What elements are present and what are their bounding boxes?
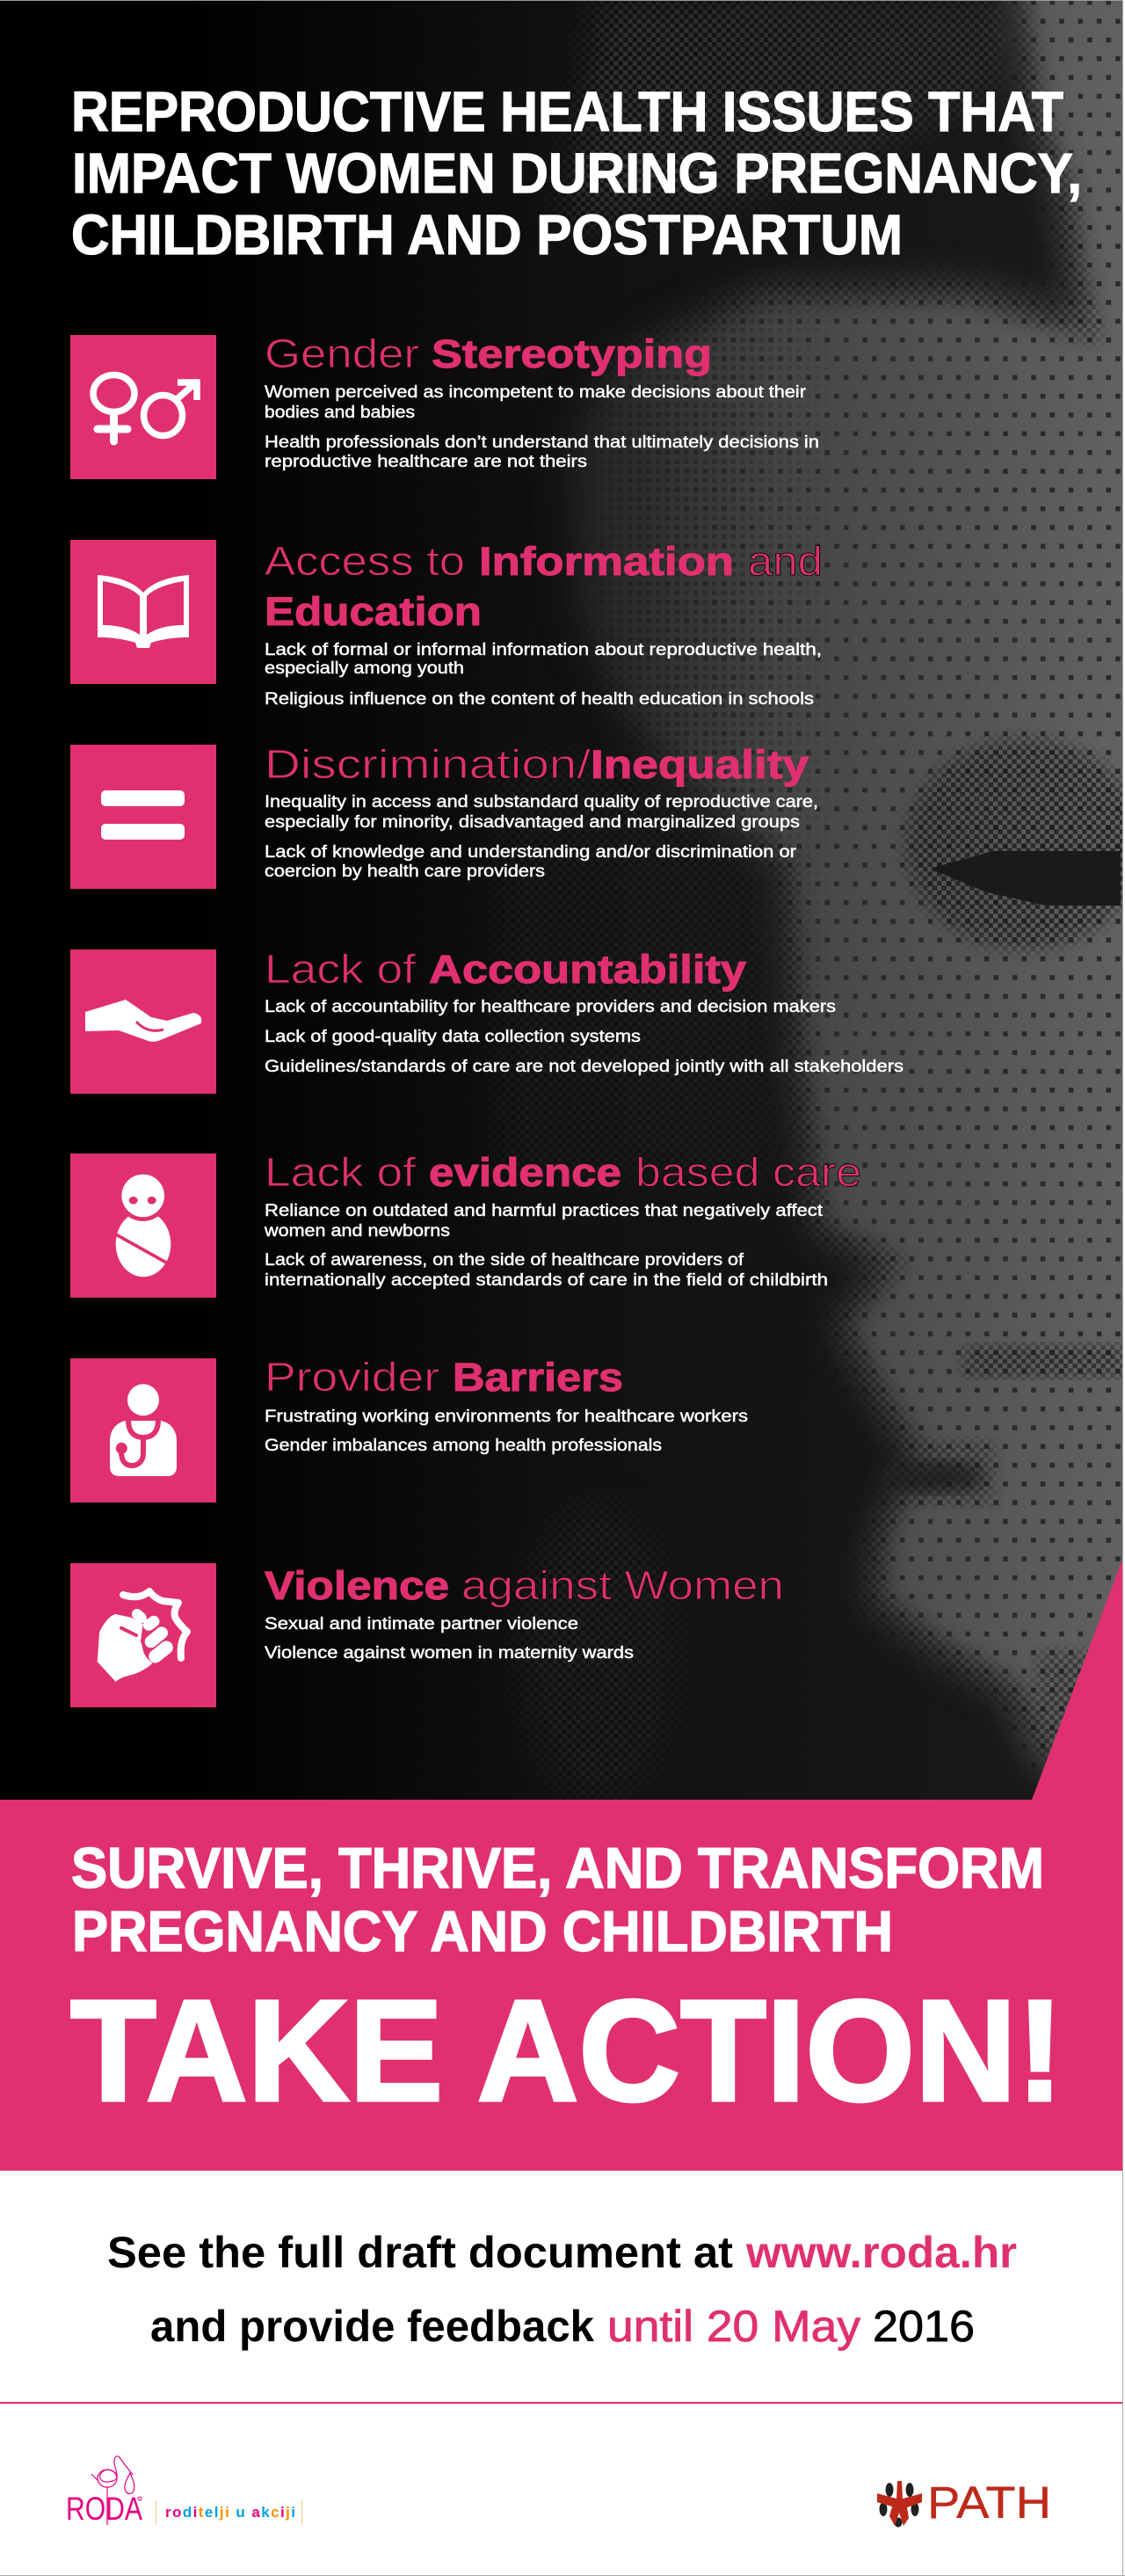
icon: fist and impact burst xyxy=(70,1563,216,1707)
body text: Lack of knowledge and understanding and/or discrimination or xyxy=(265,843,797,862)
heading xyxy=(265,1149,861,1195)
panel: accountability xyxy=(70,946,904,1094)
heading: evidence xyxy=(429,1150,621,1195)
body text: Women perceived as incompetent to make decisions about their xyxy=(265,383,807,402)
body text: Inequality in access and substandard quality of reproductive care, xyxy=(265,793,818,811)
body text: especially among youth xyxy=(265,659,464,678)
wordmark: RODA xyxy=(66,2491,142,2527)
slogan xyxy=(71,1836,1044,1963)
body text: Lack of awareness, on the side of healthcare providers of xyxy=(265,1251,744,1270)
body text: women and newborns xyxy=(264,1222,450,1241)
heading: Information xyxy=(479,539,734,584)
heading: Violence xyxy=(265,1563,449,1608)
icon: open hand xyxy=(70,950,216,1094)
body text xyxy=(264,1202,828,1290)
heading: Access to xyxy=(265,538,465,584)
panel: violence against women xyxy=(70,1562,784,1707)
body text: Frustrating working environments for healthcare workers xyxy=(265,1408,748,1426)
wordmark: PATH xyxy=(927,2478,1051,2528)
heading xyxy=(265,331,712,376)
feedback section xyxy=(0,2171,1125,2403)
body text: Lack of good-quality data collection systems xyxy=(265,1028,641,1046)
emblem xyxy=(877,2481,922,2527)
body text: Reliance on outdated and harmful practices that negatively affect xyxy=(265,1202,824,1220)
feedback line one: See the full draft document at xyxy=(107,2228,733,2277)
heading: Gender xyxy=(265,331,419,376)
heading: against Women xyxy=(461,1562,784,1608)
icon: doctor with stethoscope xyxy=(70,1358,216,1503)
take action: TAKE ACTION! xyxy=(70,1970,1063,2131)
body text: Lack of formal or informal information about reproductive health, xyxy=(265,641,822,659)
registered mark xyxy=(138,2497,142,2500)
heading: Lack of xyxy=(265,1149,416,1195)
title: IMPACT WOMEN DURING PREGNANCY, xyxy=(72,142,1082,205)
panel: access to information xyxy=(70,538,823,709)
body text: Gender imbalances among health professionals xyxy=(265,1437,662,1455)
heading: Provider xyxy=(265,1354,439,1400)
feedback line two: 2016 xyxy=(873,2302,975,2351)
panel: provider barriers xyxy=(70,1354,748,1503)
body text xyxy=(265,383,819,471)
body text: Lack of accountability for healthcare providers and decision makers xyxy=(265,998,836,1016)
heading: based care xyxy=(635,1149,861,1195)
body text: Guidelines/standards of care are not developed jointly with all stakeholders xyxy=(265,1058,904,1076)
heading: Stereotyping xyxy=(432,331,712,376)
heading: Discrimination/ xyxy=(265,741,591,787)
body text xyxy=(265,1615,634,1663)
heading: Education xyxy=(265,589,482,634)
title: REPRODUCTIVE HEALTH ISSUES THAT xyxy=(71,80,1063,143)
heading xyxy=(265,1562,784,1608)
body text xyxy=(265,793,818,881)
heading xyxy=(265,1354,623,1400)
panel: evidence based care xyxy=(70,1149,861,1298)
body text: especially for minority, disadvantaged and marginalized groups xyxy=(265,813,800,832)
body text: coercion by health care providers xyxy=(265,862,545,881)
logo: PATH xyxy=(877,2478,1051,2528)
heading xyxy=(265,946,746,992)
feedback line one xyxy=(107,2228,1017,2277)
slogan: SURVIVE, THRIVE, AND TRANSFORM xyxy=(71,1836,1044,1900)
feedback line one: www.roda.hr xyxy=(745,2228,1017,2277)
heading: Accountability xyxy=(429,947,746,992)
heading xyxy=(265,538,823,634)
body text: Religious influence on the content of health education in schools xyxy=(265,690,814,709)
heading xyxy=(265,741,809,787)
body text: internationally accepted standards of care in the field of childbirth xyxy=(265,1271,828,1290)
body text: Violence against women in maternity wards xyxy=(265,1644,634,1663)
panel: discrimination xyxy=(70,741,818,889)
feedback line two: until 20 May xyxy=(607,2302,860,2351)
icon: swaddled baby xyxy=(70,1153,216,1298)
feedback line two xyxy=(150,2302,975,2351)
body text: bodies and babies xyxy=(265,404,415,422)
logo: RODA xyxy=(66,2456,302,2527)
icon: open book xyxy=(70,540,216,684)
background portrait halftone xyxy=(0,0,1125,1801)
body text: reproductive healthcare are not theirs xyxy=(265,453,587,471)
body text xyxy=(265,641,822,709)
title: CHILDBIRTH AND POSTPARTUM xyxy=(71,203,903,266)
heading: Inequality xyxy=(591,742,809,787)
panel: gender stereotyping xyxy=(70,331,819,479)
title xyxy=(71,80,1082,266)
body text: Sexual and intimate partner violence xyxy=(265,1615,578,1634)
heading: Lack of xyxy=(265,946,416,992)
tagline: roditelji u akciji xyxy=(165,2504,295,2521)
body text xyxy=(265,1408,748,1455)
slogan: PREGNANCY AND CHILDBIRTH xyxy=(72,1899,893,1963)
icon: equals sign xyxy=(70,745,216,889)
heading: Barriers xyxy=(453,1355,623,1400)
feedback line two: and provide feedback xyxy=(150,2302,594,2351)
icon: gender symbols xyxy=(70,335,216,479)
body text: Health professionals don’t understand that ultimately decisions in xyxy=(265,433,819,452)
heading: and xyxy=(748,538,823,584)
call to action band xyxy=(0,1553,1125,2171)
stork xyxy=(91,2456,134,2525)
divider xyxy=(0,2402,1125,2404)
body text xyxy=(265,998,904,1076)
